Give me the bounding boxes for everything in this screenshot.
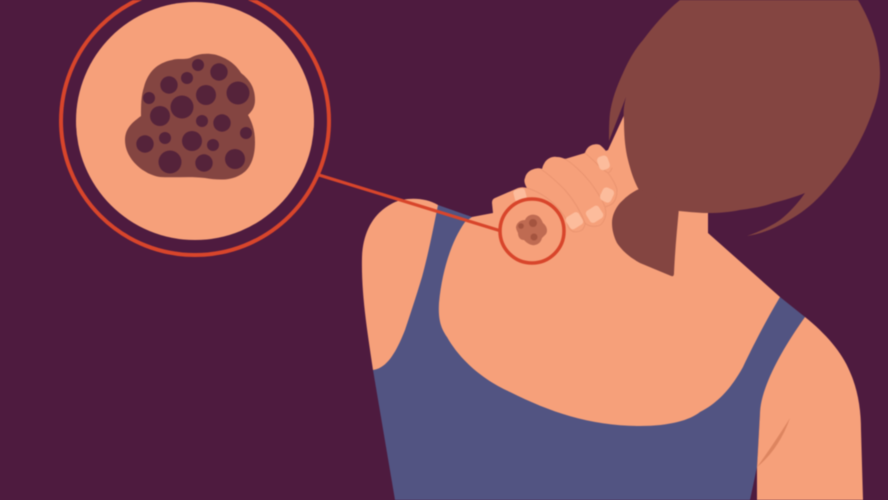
hair — [609, 0, 880, 276]
hair main and ponytail — [609, 0, 880, 236]
small mole — [516, 215, 547, 245]
small ring with mole — [500, 199, 564, 263]
arm fold crease — [757, 418, 790, 467]
finger outlines — [527, 153, 617, 232]
right arm — [757, 317, 863, 500]
hand on neck — [492, 144, 617, 240]
hair lower lobe — [612, 189, 679, 276]
magnifier skin disc — [76, 2, 314, 240]
mole spots — [136, 59, 252, 174]
back and neck skin — [439, 113, 780, 426]
magnifier outer ring — [61, 0, 329, 255]
hand shape — [492, 144, 617, 240]
left arm — [362, 199, 438, 370]
blue tank top — [373, 205, 805, 500]
mole body — [125, 54, 255, 180]
fingernails — [513, 154, 615, 231]
connector line — [319, 175, 501, 231]
enlarged mole — [125, 54, 255, 180]
